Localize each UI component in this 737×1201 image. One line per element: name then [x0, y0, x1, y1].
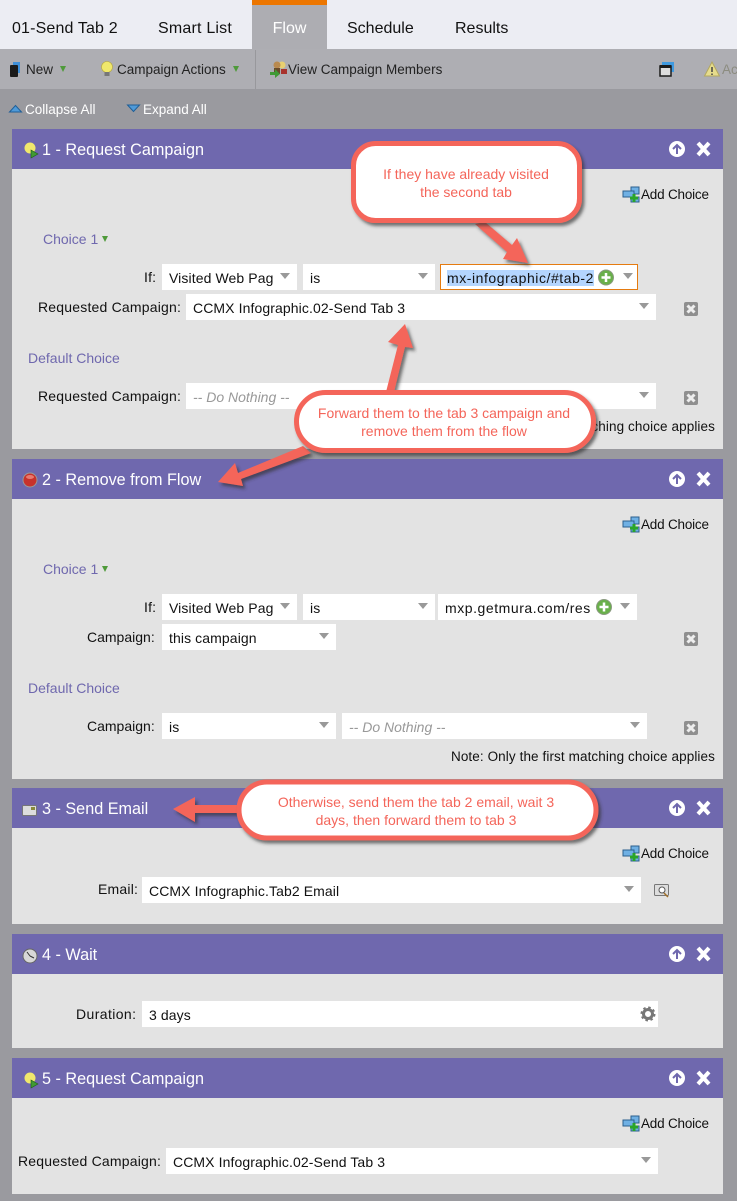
icon: clock	[23, 949, 37, 963]
callout: already visited: the second tab	[420, 184, 512, 200]
icons: choice arrows	[102, 236, 108, 572]
default choice: Default Choice	[28, 680, 120, 696]
field: email: CCMX Infographic.Tab2 Email	[149, 883, 339, 899]
note: Note: Only the first matching choice applies	[451, 419, 715, 434]
panel: 2 Remove from Flow	[12, 459, 723, 779]
heading	[12, 459, 723, 499]
icon: request campaign 1	[24, 142, 38, 158]
tab bar	[0, 0, 737, 49]
icon: remove from flow	[23, 473, 37, 487]
callout: otherwise send email: days, then forward them to tab 3	[316, 812, 517, 828]
if label: If:	[144, 599, 156, 615]
button: Campaign Actions: Campaign Actions	[117, 62, 226, 77]
campaign label: Campaign:	[87, 629, 155, 645]
field: visited	[162, 594, 297, 620]
icon: collapse	[10, 106, 22, 112]
icons: delete buttons	[684, 302, 698, 735]
add choice: Add Choice	[641, 187, 709, 202]
arrow: to requested campaign	[386, 324, 413, 392]
arrow: to tab 2 field	[475, 222, 528, 263]
collapse all: Collapse All	[25, 102, 96, 117]
icon: toolbar bulb	[102, 62, 112, 76]
tab: Results: Results	[455, 20, 508, 37]
icon: new	[10, 62, 20, 77]
button: View Campaign Members: View Campaign Members	[288, 62, 442, 77]
field: is	[162, 713, 336, 739]
field: url: mx-infographic/#tab-2	[447, 270, 594, 286]
icon: window	[660, 62, 674, 76]
toolbar	[0, 49, 737, 89]
field: requested campaign: CCMX Infographic.02-Send Tab 3	[173, 1154, 385, 1170]
panel: 1 Request Campaign	[12, 129, 723, 449]
icon: warning	[704, 62, 720, 76]
requested label: Requested Campaign:	[18, 1153, 161, 1169]
field: do nothing	[186, 383, 656, 409]
add choice: Add Choice	[641, 846, 709, 861]
field: email	[142, 877, 641, 903]
icon: menu arrow new	[60, 66, 66, 72]
panel: 4 Wait	[12, 934, 723, 1048]
field: url: mxp.getmura.com/res	[445, 600, 591, 616]
panel: 3 Send Email	[12, 788, 723, 924]
arrow: to send email	[173, 797, 240, 822]
heading	[12, 788, 723, 828]
tab: Smart List: Smart List	[158, 20, 232, 37]
icon: members	[270, 62, 287, 78]
field: requested campaign: CCMX Infographic.02-Send Tab 3	[193, 300, 405, 316]
icons: green plus buttons	[596, 270, 614, 614]
heading: 3 - Send Email	[42, 800, 148, 818]
field: do nothing	[342, 713, 647, 739]
field: this campaign: this campaign	[169, 630, 257, 646]
if label: If:	[144, 269, 156, 285]
expand all: Expand All	[143, 102, 207, 117]
field: requested campaign	[166, 1148, 658, 1174]
choice 1: Choice 1	[43, 231, 98, 247]
field: do nothing: -- Do Nothing --	[193, 389, 289, 405]
field: visited	[162, 264, 297, 290]
callout: already visited: If they have already visited	[383, 166, 549, 182]
tab: 01-Send Tab 2: 01-Send Tab 2	[12, 20, 118, 37]
field: do nothing: -- Do Nothing --	[349, 719, 445, 735]
heading	[12, 934, 723, 974]
callout: otherwise send email: Otherwise, send them the tab 2 email, wait 3	[278, 794, 554, 810]
default choice: Default Choice	[28, 350, 120, 366]
arrow: to remove from flow	[218, 446, 311, 486]
duration label: Duration:	[76, 1006, 136, 1022]
toolbar divider	[254, 50, 256, 89]
heading: 5 - Request Campaign	[42, 1070, 204, 1088]
heading: 1 - Request Campaign	[42, 141, 204, 159]
field: visited: Visited Web Pag	[169, 270, 274, 286]
heading: 4 - Wait	[42, 946, 97, 964]
field: is	[303, 264, 435, 290]
choice 1: Choice 1	[43, 561, 98, 577]
add choice: Add Choice	[641, 517, 709, 532]
heading: 2 - Remove from Flow	[42, 471, 201, 489]
button: New: New	[26, 62, 53, 77]
icon: expand	[128, 105, 140, 112]
field: is	[303, 594, 435, 620]
field: is: is	[310, 270, 320, 286]
field: duration	[142, 1001, 658, 1027]
icon: email	[22, 806, 36, 816]
callout: forward to tab 3: Forward them to the tab 3 campaign and	[318, 405, 570, 421]
requested label: Requested Campaign:	[38, 388, 181, 404]
field: url	[438, 594, 637, 620]
campaign label: Campaign:	[87, 718, 155, 734]
heading	[12, 1058, 723, 1098]
tab: Schedule: Schedule	[347, 20, 414, 37]
field: is: is	[310, 600, 320, 616]
callout: already visited	[354, 144, 580, 220]
panel: 5 Request Campaign	[12, 1058, 723, 1194]
requested label: Requested Campaign:	[38, 299, 181, 315]
callout: forward to tab 3	[296, 392, 594, 450]
add choice: Add Choice	[641, 1116, 709, 1131]
heading	[12, 129, 723, 169]
field: this campaign	[162, 624, 336, 650]
callout: otherwise send email	[239, 782, 596, 838]
icon: menu arrow actions	[233, 66, 239, 72]
tab: Flow active: Flow	[273, 20, 306, 37]
icon: request campaign 5	[24, 1072, 38, 1088]
field: requested campaign	[186, 294, 656, 320]
tab: Flow active	[252, 0, 327, 49]
note: Note: Only the first matching choice applies	[451, 749, 715, 764]
field: url	[440, 264, 638, 290]
field: duration: 3 days	[149, 1007, 191, 1023]
field: is: is	[169, 719, 179, 735]
icons: add choice	[623, 187, 639, 1131]
email label: Email:	[98, 881, 138, 897]
panel controls: up arrows and close marks	[669, 141, 709, 1086]
icon: gear	[642, 1008, 654, 1020]
icon: preview	[654, 884, 668, 897]
callout: forward to tab 3: remove them from the flow	[361, 423, 528, 439]
field: visited: Visited Web Pag	[169, 600, 274, 616]
